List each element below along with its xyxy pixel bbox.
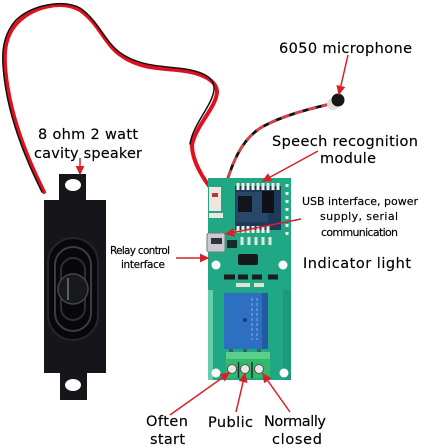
label: USB interface	[302, 195, 418, 239]
relay	[224, 293, 268, 354]
arrows	[80, 55, 348, 415]
label: often start: Often	[146, 414, 188, 430]
label: normally closed: Normally	[264, 414, 326, 430]
connector	[209, 187, 223, 218]
label: public: Public	[208, 415, 253, 431]
label: 6050 microphone: 6050 microphone	[279, 41, 412, 57]
label: speech recognition module: module	[320, 151, 376, 167]
icon: microphone	[327, 94, 344, 110]
label: speech recognition module: Speech recognition	[272, 134, 418, 150]
arrow: USB interface	[226, 219, 301, 234]
label: USB interface: supply, serial	[320, 210, 398, 223]
label: often start	[146, 414, 188, 448]
arrow: microphone	[339, 55, 348, 94]
label: USB interface: USB interface, power	[302, 195, 418, 208]
arrow: public	[236, 374, 245, 412]
arrow: relay control interface	[176, 257, 208, 259]
arrow: speech recognition module	[263, 151, 318, 181]
label: normally closed	[264, 414, 326, 448]
speaker	[44, 174, 106, 400]
label: speech recognition module	[272, 134, 418, 167]
label: relay control interface: interface	[121, 259, 165, 271]
microphone cable	[224, 104, 330, 190]
indicator sensor and components	[224, 237, 278, 285]
USB port	[207, 233, 225, 252]
label: USB interface: communication	[321, 226, 398, 239]
label: cavity speaker: cavity speaker	[34, 146, 142, 162]
label: often start: start	[150, 432, 185, 448]
label: cavity speaker: 8 ohm 2 watt	[38, 127, 138, 143]
arrow: often start	[170, 373, 229, 415]
screw terminal	[226, 352, 270, 378]
label: relay control interface	[110, 245, 170, 271]
arrow: normally closed	[263, 374, 290, 412]
arrow: speaker	[79, 158, 81, 174]
label: indicator light: Indicator light	[303, 256, 411, 272]
label: relay control interface: Relay control	[110, 245, 170, 257]
speech recognition chip	[235, 183, 287, 240]
circuit board	[207, 178, 291, 380]
label: cavity speaker	[34, 127, 142, 162]
speaker cable	[3, 4, 217, 192]
mounting holes	[212, 260, 288, 378]
label: normally closed: closed	[272, 432, 322, 448]
speaker grill	[48, 238, 98, 340]
